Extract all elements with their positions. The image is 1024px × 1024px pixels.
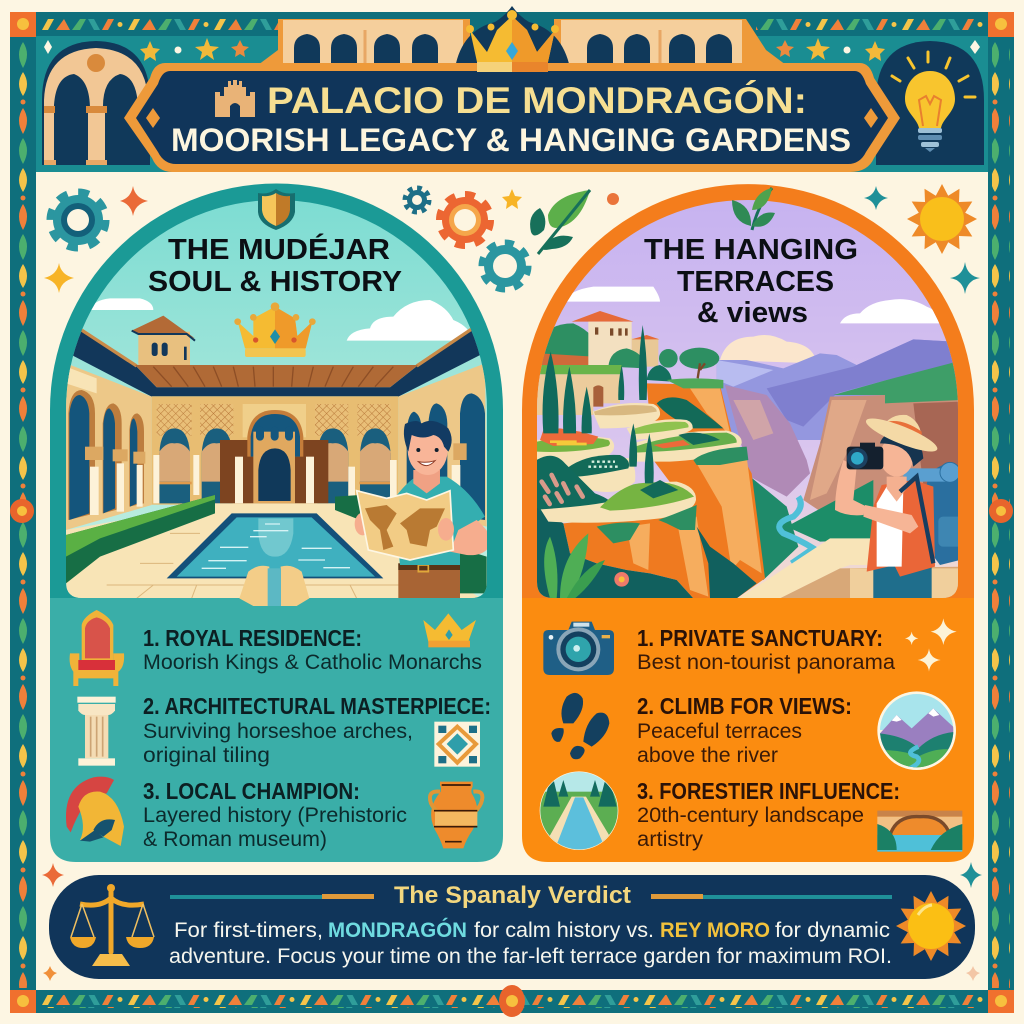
- list text: left: Moorish Kings & Catholic Monarchs: [143, 651, 482, 674]
- balustrade: [737, 538, 873, 600]
- verdict text: REY MORO: [660, 919, 770, 942]
- heading: right panel: & views: [697, 297, 808, 329]
- left wing wall: [66, 363, 152, 530]
- illustration: gardens and canyon: [537, 200, 958, 598]
- bush behind terraces: [657, 397, 723, 428]
- terrace 1: [593, 403, 660, 428]
- list text: right: 3. FORESTIER INFLUENCE:: [637, 778, 900, 804]
- watchtower: [138, 332, 190, 365]
- heading: right panel: [644, 234, 858, 329]
- crown backdrop: [455, 6, 570, 68]
- title text: PALACIO DE MONDRAGÓN:: [267, 79, 807, 121]
- list text: left: original tiling: [143, 744, 270, 767]
- wings roofs: [72, 328, 157, 397]
- list text: right: artistry: [637, 828, 704, 851]
- panel: verdict: [49, 875, 975, 979]
- header band: [36, 6, 988, 172]
- sprig ornament: [732, 188, 775, 230]
- illustration: palace courtyard: [66, 200, 487, 598]
- list text: left: [143, 625, 491, 851]
- list text: left: 1. ROYAL RESIDENCE:: [143, 625, 362, 651]
- verdict rules: [170, 894, 892, 899]
- cypresses: [543, 325, 654, 483]
- clouds: [90, 298, 473, 341]
- list text: left: Layered history (Prehistoric: [143, 804, 407, 827]
- arch backdrop left: [42, 41, 150, 165]
- verdict heading: The Spanaly Verdict: [394, 882, 631, 909]
- list text: right: 1. PRIVATE SANCTUARY:: [637, 625, 883, 651]
- crest shield: [258, 189, 295, 230]
- verdict text: MONDRAGÓN: [328, 918, 467, 942]
- title plaque: [124, 63, 900, 172]
- crown in sky: [234, 302, 316, 357]
- list text: right: Best non-tourist panorama: [637, 651, 895, 674]
- list text: right: 2. CLIMB FOR VIEWS:: [637, 693, 852, 719]
- icon: header crown: [466, 10, 559, 72]
- small foliage on lips: [597, 447, 748, 543]
- title text: MOORISH LEGACY & HANGING GARDENS: [171, 122, 851, 158]
- right hedge: [335, 495, 360, 520]
- canyon walls: [725, 385, 810, 497]
- heading: left panel: SOUL & HISTORY: [148, 266, 402, 298]
- foliage bottom: [537, 507, 693, 598]
- upper garden: [542, 323, 588, 364]
- list text: right: Peaceful terraces: [637, 720, 802, 743]
- decorative icons: gears, stars, leaf, sun: [42, 184, 982, 981]
- clouds: [563, 287, 942, 323]
- terrace wall top: [537, 365, 622, 374]
- terrace 3: [633, 431, 742, 462]
- heading: right panel: THE HANGING: [644, 234, 858, 266]
- guide man: [398, 563, 460, 598]
- icons: left list: [66, 610, 482, 848]
- list text: right: above the river: [637, 744, 778, 767]
- arcade left: [258, 19, 470, 65]
- list: right panel items: [538, 618, 962, 853]
- list text: left: 3. LOCAL CHAMPION:: [143, 778, 360, 804]
- terrace 2: [627, 419, 693, 440]
- icon: light bulb: [892, 52, 975, 152]
- heading: left panel: THE MUDÉJAR: [168, 232, 390, 266]
- list text: left: Surviving horseshoe arches,: [143, 720, 413, 743]
- list text: right: 20th-century landscape: [637, 804, 864, 827]
- list text: left: 2. ARCHITECTURAL MASTERPIECE:: [143, 693, 491, 719]
- verdict text: For first-timers,: [174, 919, 323, 942]
- valley: [752, 478, 798, 580]
- verdict text: for dynamic: [775, 919, 890, 942]
- title text: [171, 79, 851, 158]
- verdict text: for calm history vs.: [474, 919, 654, 942]
- list text: left: & Roman museum): [143, 828, 327, 851]
- pool: [167, 513, 383, 578]
- back wall: [152, 396, 398, 505]
- list text: right: [637, 625, 900, 851]
- left hedge: [66, 495, 215, 583]
- right wing wall: [398, 363, 487, 527]
- heading: left panel: [148, 232, 402, 298]
- terrace 5: [578, 458, 636, 492]
- left bush: [537, 456, 615, 512]
- cliffs: [647, 383, 765, 598]
- panel: hanging terraces and views: [513, 184, 980, 862]
- back roof: [135, 365, 418, 387]
- heading: right panel: TERRACES: [677, 266, 834, 298]
- fountain: [239, 566, 309, 606]
- icons: right list: [538, 618, 962, 853]
- photographer: [835, 413, 963, 600]
- terrace 6: [541, 482, 696, 523]
- mountains: [717, 339, 960, 440]
- arcade right: [554, 19, 786, 65]
- icon: scales: [70, 884, 154, 966]
- list: left panel items: [66, 610, 491, 851]
- central portal: [220, 440, 328, 503]
- terrace 4: [537, 436, 614, 467]
- panel: Mudéjar soul and history: [33, 184, 503, 862]
- icon: double arch: [44, 48, 148, 165]
- header stars: [44, 38, 980, 61]
- icon: sun: [896, 891, 966, 961]
- verdict text: [169, 918, 892, 968]
- arch backdrop right: [876, 41, 984, 165]
- verdict text: adventure. Focus your time on the far-left terrace garden for maximum ROI.: [169, 945, 892, 968]
- courtyard floor: [66, 503, 483, 600]
- icon: castle: [215, 80, 255, 117]
